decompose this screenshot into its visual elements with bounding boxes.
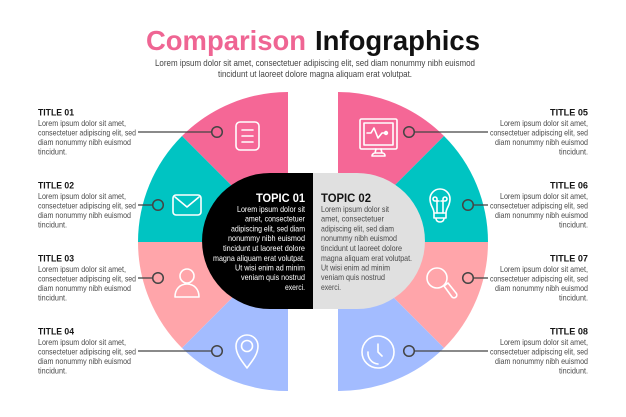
text: title 07: TITLE 07	[550, 254, 588, 264]
text: title 05	[490, 108, 589, 156]
connector: title 04	[138, 346, 222, 356]
icon: document	[236, 122, 259, 150]
topic 01 text: adipiscing elit, sed diam	[231, 223, 305, 233]
segment: blue left	[182, 242, 288, 391]
text: title 03	[38, 254, 136, 302]
topic 01 text: Ut wisi enim ad minim	[235, 263, 305, 273]
text: title 03: Lorem ipsum dolor sit amet,	[38, 264, 126, 274]
text: title 03: TITLE 03	[38, 254, 74, 264]
icon: mail	[173, 195, 201, 215]
topic 02 text: exerci.	[321, 282, 341, 292]
text: title 01: Lorem ipsum dolor sit amet,	[38, 118, 126, 128]
segment: teal right	[338, 136, 488, 242]
text: title 04	[38, 326, 136, 376]
text: title 06: diam nonummy nibh euismod	[495, 210, 588, 220]
topic 02 text	[321, 193, 412, 292]
text: title 07: consectetuer adipiscing elit, sed	[490, 274, 588, 284]
text: title 03: consectetuer adipiscing elit, sed	[38, 274, 136, 284]
subtitle: tincidunt ut laoreet dolore magna aliquam erat volutpat.	[218, 69, 412, 79]
text: title 08: consectetuer adipiscing elit, sed	[490, 346, 588, 356]
icon: monitor	[360, 119, 397, 156]
segment: salmon left	[138, 242, 288, 348]
topic 01 text	[213, 193, 306, 292]
topic 02 text: magna aliquam erat volutpat.	[321, 253, 412, 263]
text: title 06: TITLE 06	[550, 180, 588, 192]
icon: light bulb	[430, 189, 450, 222]
icon: location pin	[236, 335, 258, 368]
text: title 08	[490, 326, 588, 376]
text: title 02	[38, 180, 136, 230]
text: title 04: diam nonummy nibh euismod	[38, 356, 131, 366]
text: title 07: tincidunt.	[559, 292, 588, 302]
text: title 02: Lorem ipsum dolor sit amet,	[38, 191, 126, 201]
text: title 04: tincidunt.	[38, 366, 67, 376]
text: title 08: diam nonummy nibh euismod	[495, 356, 588, 366]
connector: title 02	[138, 200, 163, 210]
text: title 07: Lorem ipsum dolor sit amet,	[500, 264, 588, 274]
text: title 02: TITLE 02	[38, 180, 74, 192]
text: title 07	[490, 254, 588, 302]
topic 02 text: Ut wisi enim ad minim	[321, 263, 390, 273]
text: title 02: consectetuer adipiscing elit, sed	[38, 200, 136, 210]
topic 02 text: adipiscing elit, sed diam	[321, 223, 394, 233]
text: title 01: tincidunt.	[38, 146, 67, 156]
text: title 01: diam nonummy nibh euismod	[38, 137, 131, 147]
text: title 02: diam nonummy nibh euismod	[38, 210, 131, 220]
topic 02 text: amet, consectetuer	[321, 214, 384, 224]
topic 01 text: veniam quis nostrud	[241, 272, 305, 282]
text: title 04: Lorem ipsum dolor sit amet,	[38, 337, 126, 347]
topic 01 text: magna aliquam erat volutpat.	[213, 253, 305, 263]
text: title 06: consectetuer adipiscing elit, sed	[490, 200, 588, 210]
capsule: gray right half	[313, 173, 425, 309]
text: title 05: TITLE 05	[550, 108, 589, 118]
text: title 05: tincidunt.	[559, 146, 588, 156]
icon: person	[175, 269, 199, 297]
title	[146, 25, 480, 56]
icon: clock	[362, 336, 394, 368]
topic 01 text: Lorem ipsum dolor sit	[237, 204, 306, 214]
icon: magnifier	[427, 268, 457, 298]
segment: pink right	[338, 92, 444, 242]
topic 01 text: amet, consectetuer	[245, 214, 305, 224]
text: title 05: consectetuer adipiscing elit, sed	[490, 128, 588, 138]
title: Comparison	[146, 25, 306, 56]
connector: title 06	[463, 200, 488, 210]
text: title 04: TITLE 04	[38, 326, 75, 338]
segment: blue right	[338, 242, 444, 391]
segment: salmon right	[338, 242, 488, 348]
topic 02 text: nonummy nibh euismod	[321, 233, 397, 243]
text: title 08: tincidunt.	[559, 366, 588, 376]
connector: title 03	[138, 273, 163, 283]
connector: title 07	[463, 273, 488, 283]
capsule: black left half	[202, 173, 313, 309]
topic 01 text: tincidunt ut laoreet dolore	[223, 243, 305, 253]
text: title 02: tincidunt.	[38, 220, 67, 230]
text: title 04: consectetuer adipiscing elit, sed	[38, 346, 136, 356]
text: title 03: diam nonummy nibh euismod	[38, 283, 131, 293]
topic 02 text: TOPIC 02	[321, 193, 371, 205]
text: title 01	[38, 108, 136, 156]
text: title 05: diam nonummy nibh euismod	[495, 137, 588, 147]
topic 02 text: Lorem ipsum dolor sit	[321, 204, 390, 214]
text: title 01: TITLE 01	[38, 108, 75, 118]
text: title 06: Lorem ipsum dolor sit amet,	[500, 191, 588, 201]
segment: pink left	[182, 92, 288, 242]
text: title 06	[490, 180, 588, 230]
topic 01 text: nonummy nibh euismod	[228, 233, 305, 243]
text: title 08: Lorem ipsum dolor sit amet,	[500, 337, 588, 347]
text: title 07: diam nonummy nibh euismod	[495, 283, 588, 293]
topic 02 text: veniam quis nostrud	[321, 272, 385, 282]
topic 01 text: TOPIC 01	[256, 193, 306, 205]
connector: title 08	[404, 346, 488, 356]
text: title 08: TITLE 08	[550, 326, 588, 338]
title: Infographics	[315, 25, 480, 56]
text: title 03: tincidunt.	[38, 292, 67, 302]
text: title 05: Lorem ipsum dolor sit amet,	[500, 118, 588, 128]
connector: title 01	[138, 127, 222, 137]
subtitle: Lorem ipsum dolor sit amet, consectetuer adipiscing elit, sed diam nonummy nibh euismod	[155, 58, 475, 68]
subtitle	[155, 58, 475, 79]
topic 02 text: tincidunt ut laoreet dolore	[321, 243, 402, 253]
text: title 01: consectetuer adipiscing elit, sed	[38, 128, 136, 138]
topic 01 text: exerci.	[285, 282, 305, 292]
text: title 06: tincidunt.	[559, 220, 588, 230]
segment: teal left	[138, 136, 288, 242]
connector: title 05	[404, 127, 488, 137]
